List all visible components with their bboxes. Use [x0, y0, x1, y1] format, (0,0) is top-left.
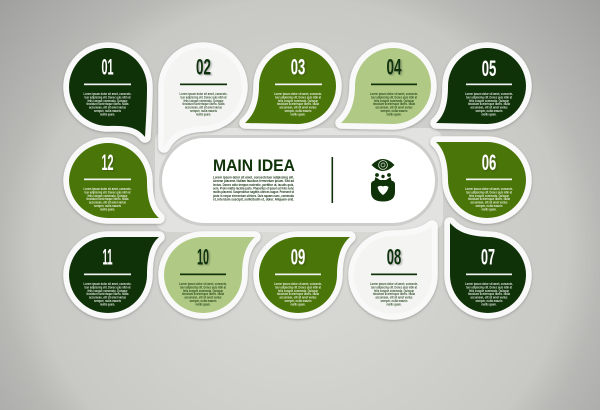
text [84, 187, 132, 211]
text: mollis quam. [100, 112, 115, 116]
text: felis congue commodo. Quisque [469, 99, 509, 103]
text: mollis quam. [290, 112, 306, 116]
divider [332, 157, 333, 203]
text: semper, nulla mauris [284, 299, 312, 303]
text [465, 92, 513, 116]
text: Lorem ipsum dolor sit amet, consecte- [465, 92, 513, 96]
panel: main idea [160, 136, 436, 224]
shape [354, 226, 432, 314]
rule [466, 84, 512, 85]
shape [69, 143, 159, 218]
rule [84, 178, 131, 180]
text [180, 92, 228, 116]
text: mollis quam. [100, 207, 115, 211]
drop 12 [69, 143, 159, 218]
text: accumsan, elit sit amet varius [470, 106, 508, 110]
body text: lectus. Donec odio tempus molestie, porttitor ut, iaculis quis, [213, 183, 294, 187]
text: tincidunt scelerisque libero. Nulla [277, 102, 319, 106]
text: Lorem ipsum dolor sit amet, consecte- [180, 92, 228, 96]
drop 03 [245, 48, 336, 124]
text: accumsan, elit sit amet varius [280, 296, 317, 300]
text: semper, nulla mauris [190, 299, 217, 303]
rule [84, 84, 131, 85]
number: 05 [482, 56, 496, 81]
shape [341, 48, 431, 124]
text: tuer adipiscing elit. Donec quis nibh at [84, 95, 131, 99]
rule [180, 274, 226, 275]
text: tincidunt scelerisque libero. Nulla [86, 102, 129, 106]
text: tuer adipiscing elit. Donec quis nibh at [180, 95, 227, 99]
drop 01 [69, 48, 147, 137]
text [84, 92, 132, 116]
text: mollis quam. [100, 302, 115, 306]
body text: mollis placerat. Suspendisse sagittis ultrices augue. Praesent id [213, 190, 295, 194]
text: tincidunt scelerisque libero. Nulla [468, 292, 510, 296]
drop 10: 10 [197, 244, 209, 270]
text: tuer adipiscing elit. Donec quis nibh at [84, 285, 131, 289]
text: mollis quam. [482, 302, 497, 306]
body text [212, 176, 295, 202]
text: felis congue commodo. Quisque [184, 99, 224, 103]
body text: justo in neque elementum ultrices. Duis aquam nunc, commodo [212, 194, 295, 198]
text: Lorem ipsum dolor sit amet, consecte- [84, 187, 132, 191]
pill shape [160, 136, 436, 224]
drop 04 [341, 48, 431, 124]
text: semper, nulla mauris [284, 109, 312, 113]
drop 01: 01 [102, 54, 114, 80]
text: semper, nulla mauris [476, 204, 503, 208]
text: Lorem ipsum dolor sit amet, consecte- [465, 187, 513, 191]
shape [436, 142, 526, 218]
text: accumsan, elit sit amet varius [280, 106, 317, 110]
text: accumsan, elit sit amet varius [470, 201, 508, 205]
drop 10 [164, 237, 255, 313]
text: felis congue commodo. Quisque [278, 99, 318, 103]
text: Lorem ipsum dolor sit amet, consecte- [274, 282, 322, 286]
number: 02 [196, 54, 211, 80]
text: tincidunt scelerisque libero. Nulla [468, 102, 510, 106]
shape [450, 223, 526, 313]
shape [164, 237, 255, 313]
text: semper, nulla mauris [190, 109, 217, 113]
drop 06 [436, 142, 526, 218]
text [84, 282, 132, 306]
text: accumsan, elit sit amet varius [376, 296, 413, 300]
text: mollis quam. [386, 302, 402, 306]
text: tuer adipiscing elit. Donec quis nibh at [275, 285, 322, 289]
text: felis congue commodo. Quisque [183, 289, 223, 293]
text [370, 92, 418, 116]
text: semper, nulla mauris [94, 109, 121, 113]
rule [371, 84, 417, 85]
text: semper, nulla mauris [380, 109, 408, 113]
rule [84, 274, 131, 275]
drop 09 [259, 237, 350, 313]
text: Lorem ipsum dolor sit amet, consecte- [370, 92, 418, 96]
drop 11: 11 [102, 244, 112, 270]
text: mollis quam. [482, 112, 497, 116]
text: Lorem ipsum dolor sit amet, consecte- [179, 282, 227, 286]
number: 06 [482, 150, 496, 175]
shape [164, 48, 242, 147]
drop 11 [69, 237, 159, 313]
rule [275, 84, 322, 85]
drop 08 [354, 226, 432, 314]
text: tincidunt scelerisque libero. Nulla [182, 292, 224, 296]
rule [180, 84, 227, 85]
shape [259, 237, 350, 313]
text: accumsan, elit sit amet varius [89, 296, 126, 300]
text: mollis quam. [482, 207, 497, 211]
body text: sem. Proin mattis lacinia justo. Phasellus et ipsum at felis nunc [213, 186, 294, 190]
number: 08 [387, 244, 401, 270]
number: 07 [481, 244, 495, 270]
drop 02 [164, 48, 242, 147]
text: semper, nulla mauris [476, 109, 503, 113]
text: tincidunt scelerisque libero. Nulla [277, 292, 319, 296]
rule [466, 178, 512, 180]
text: tuer adipiscing elit. Donec quis nibh at [466, 95, 513, 99]
text [370, 282, 418, 306]
heading: MAIN IDEA [213, 157, 295, 175]
drop 05 [436, 48, 526, 124]
icon: eye above group shield [371, 159, 395, 202]
text: tuer adipiscing elit. Donec quis nibh at [371, 95, 418, 99]
text [179, 282, 227, 306]
drop 07 [450, 223, 526, 313]
channel backing behind the main idea [155, 128, 443, 232]
text: felis congue commodo. Quisque [88, 99, 128, 103]
text: accumsan, elit sit amet varius [89, 201, 126, 205]
number: 09 [291, 244, 305, 270]
text: tuer adipiscing elit. Donec quis nibh at [180, 285, 227, 289]
body text: et, interdum suscipit, sollicitudin et, dolor. Aliquam erat. [213, 198, 294, 202]
text: felis congue commodo. Quisque [469, 289, 509, 293]
text [274, 92, 322, 116]
text: felis congue commodo. Quisque [88, 194, 128, 198]
body text: Aenean placerat. Nullam faucibus fermentum ipsum. Sed ad [213, 179, 295, 183]
rule [371, 274, 417, 275]
text: felis congue commodo. Quisque [469, 194, 509, 198]
text: semper, nulla mauris [476, 299, 503, 303]
text: felis congue commodo. Quisque [374, 289, 414, 293]
text: tuer adipiscing elit. Donec quis nibh at [275, 95, 322, 99]
text: tincidunt scelerisque libero. Nulla [373, 102, 415, 106]
text: tincidunt scelerisque libero. Nulla [182, 102, 225, 106]
text: semper, nulla mauris [380, 299, 408, 303]
shape [436, 48, 526, 124]
backing rings of all drops [69, 48, 526, 314]
text: felis congue commodo. Quisque [88, 289, 128, 293]
text: semper, nulla mauris [94, 204, 121, 208]
text: mollis quam. [196, 302, 211, 306]
body text: Lorem ipsum dolor sit amet, consectetuer adipiscing elit. [213, 176, 294, 180]
text: mollis quam. [290, 302, 306, 306]
text: accumsan, elit sit amet varius [376, 106, 413, 110]
text: tincidunt scelerisque libero. Nulla [86, 292, 129, 296]
number: 04 [386, 54, 402, 80]
text: tincidunt scelerisque libero. Nulla [86, 197, 129, 201]
text: Lorem ipsum dolor sit amet, consecte- [84, 282, 132, 286]
number: 03 [291, 54, 305, 80]
drop 12: 12 [102, 150, 114, 175]
shape [69, 48, 147, 137]
text: tincidunt scelerisque libero. Nulla [468, 197, 510, 201]
text: mollis quam. [196, 112, 211, 116]
text: tuer adipiscing elit. Donec quis nibh at [371, 285, 418, 289]
text: tincidunt scelerisque libero. Nulla [373, 292, 415, 296]
text: felis congue commodo. Quisque [278, 289, 318, 293]
text: accumsan, elit sit amet varius [185, 106, 222, 110]
text: accumsan, elit sit amet varius [470, 296, 508, 300]
rule [466, 274, 512, 275]
text: semper, nulla mauris [94, 299, 121, 303]
text: tuer adipiscing elit. Donec quis nibh at [466, 285, 513, 289]
text: accumsan, elit sit amet varius [184, 296, 222, 300]
text: Lorem ipsum dolor sit amet, consecte- [84, 92, 132, 96]
text [274, 282, 322, 306]
text [465, 282, 513, 306]
text: Lorem ipsum dolor sit amet, consecte- [274, 92, 322, 96]
text: felis congue commodo. Quisque [374, 99, 414, 103]
text [465, 187, 513, 211]
text: Lorem ipsum dolor sit amet, consecte- [465, 282, 513, 286]
text: Lorem ipsum dolor sit amet, consecte- [370, 282, 418, 286]
text: mollis quam. [386, 112, 402, 116]
text: tuer adipiscing elit. Donec quis nibh at [84, 190, 131, 194]
rule [275, 274, 321, 275]
shape [245, 48, 336, 124]
shape [69, 237, 159, 313]
text: tuer adipiscing elit. Donec quis nibh at [466, 190, 513, 194]
text: accumsan, elit sit amet varius [89, 106, 126, 110]
